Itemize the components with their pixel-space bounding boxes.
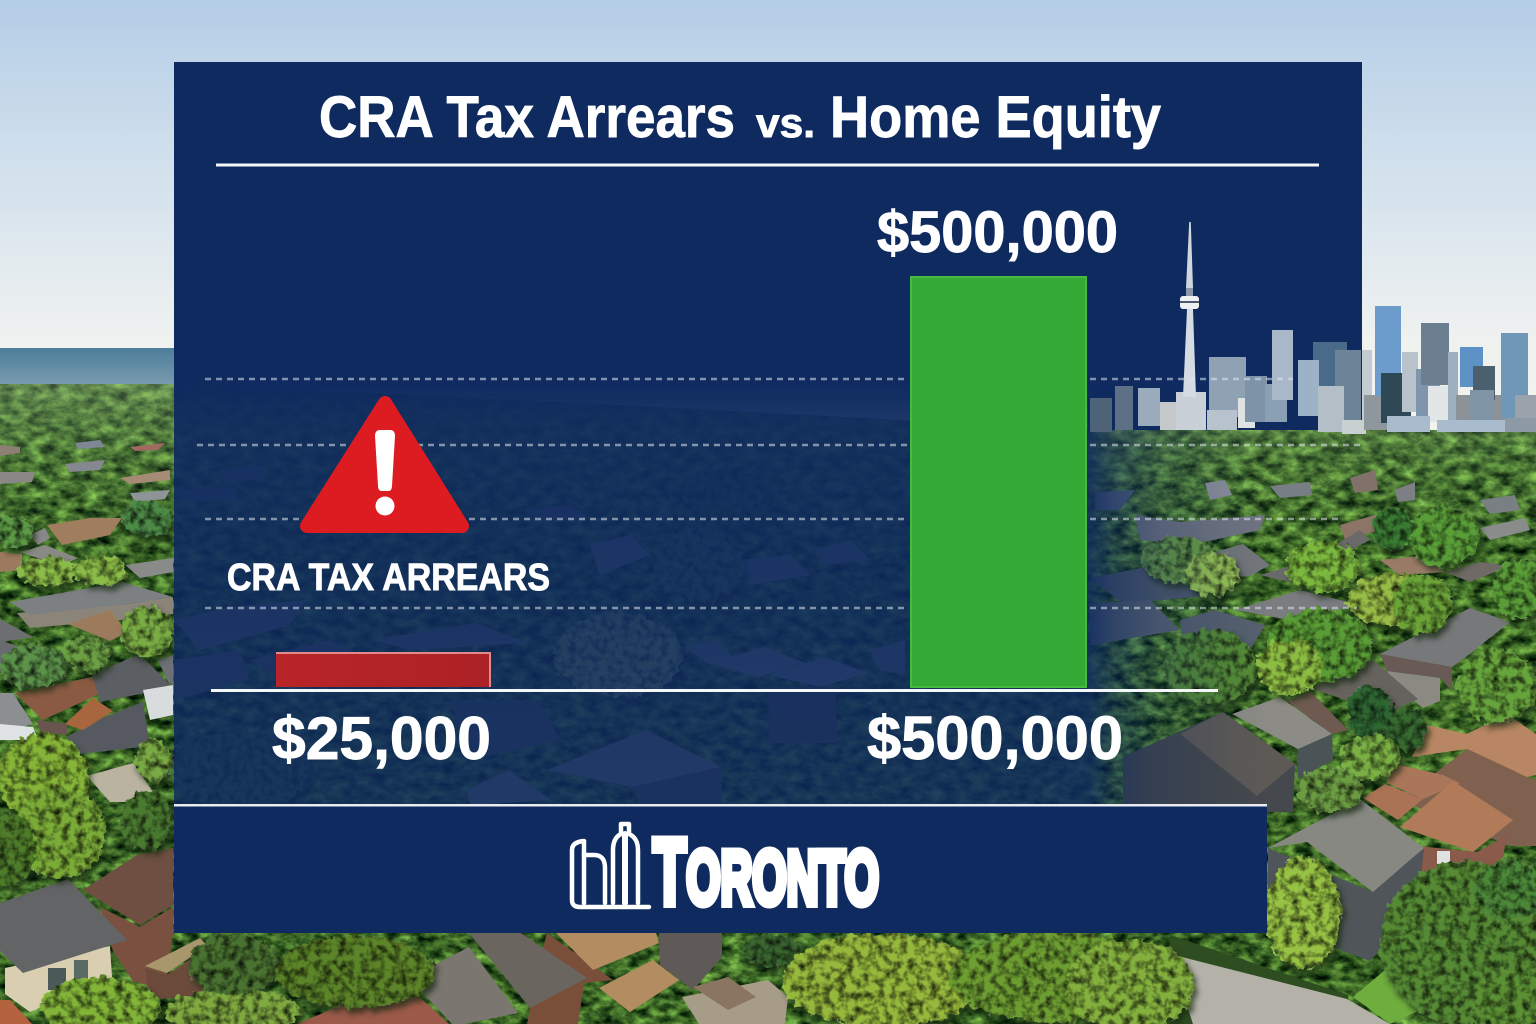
background: sky [0, 0, 1536, 440]
skyline with CN Tower [1090, 222, 1536, 434]
background: houses bottom centre [297, 933, 788, 1024]
chart gridlines [197, 379, 1360, 608]
logo wordmark: TORONTO [653, 820, 879, 925]
chart baseline [211, 689, 1218, 692]
title underline [216, 164, 1319, 166]
background: dim houses beneath panel [174, 465, 905, 805]
background: forest canopy [0, 380, 1536, 1024]
value label: home equity bottom: $500,000 [867, 704, 1123, 772]
value label: arrears: $25,000 [272, 705, 491, 772]
background: distant houses [0, 440, 1530, 582]
title: Home Equity [830, 85, 1161, 150]
title: vs. [756, 100, 815, 146]
background: houses left side [0, 582, 173, 802]
background: houses bottom left [0, 848, 207, 1024]
background: houses right side [1090, 530, 1536, 961]
icon: warning triangle [307, 403, 462, 526]
title [319, 85, 1161, 150]
panel background [174, 62, 1362, 805]
label: CRA tax arrears: CRA TAX ARREARS [227, 557, 550, 599]
value label: home equity top: $500,000 [877, 200, 1118, 265]
background: trees [0, 470, 1536, 1024]
logo: Toronto [572, 820, 879, 925]
background: road and lawn bottom right [1170, 935, 1420, 1024]
logo mark: city hall [572, 824, 649, 907]
red bar: tax arrears [276, 652, 491, 687]
green bar: home equity [910, 276, 1087, 688]
footer band [174, 804, 1267, 933]
title: CRA Tax Arrears [319, 85, 735, 150]
background: lake [0, 348, 760, 390]
